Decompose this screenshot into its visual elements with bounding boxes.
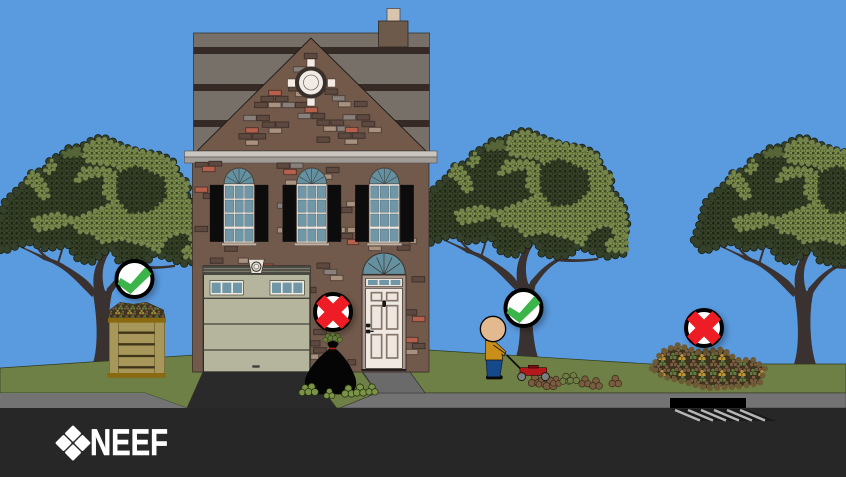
tree: right [694,137,846,366]
front door [361,253,406,371]
black garbage bag with leaves [299,332,378,399]
badge: compost bin approved [116,261,158,302]
wall bricks [195,161,425,365]
road band [0,408,846,477]
compost bin [107,302,166,378]
logo wordmark: NEEF [90,422,168,463]
badge: mulching mower approved [506,290,546,331]
gable bricks [239,53,381,145]
upper windows [210,168,414,246]
chimney [378,8,408,47]
ground: lawn, sidewalk, driveway [0,350,846,408]
roof [194,33,430,153]
person pushing lawn mower [480,316,549,381]
leaf pile at the curb [652,345,765,388]
house wall [192,160,429,372]
garage [203,259,310,372]
logo: NEEF [55,422,168,463]
badge: curb pile rejected [686,310,727,351]
tree: middle [416,130,627,359]
badge: garbage bag rejected [315,294,356,335]
storm drain [670,398,746,409]
tree: left [0,137,204,366]
gable [197,38,426,151]
logo mark [55,425,91,461]
mulched leaves [528,373,622,390]
gable round window [288,59,336,106]
house [184,8,437,372]
storm drain grate [670,409,776,421]
cornice [184,151,437,163]
